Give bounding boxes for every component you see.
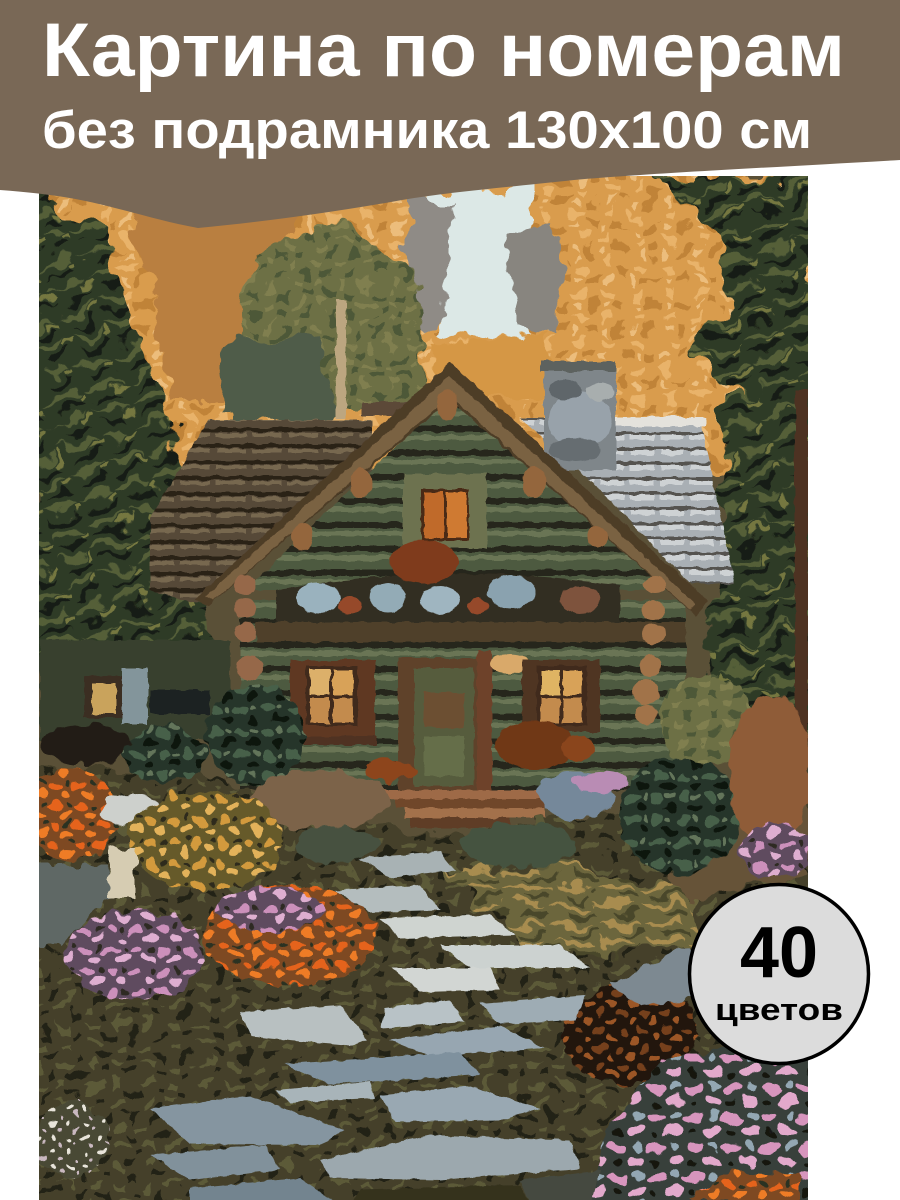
badge number: 40 [740, 913, 818, 993]
right shingled roof [520, 418, 735, 584]
garden foreground [30, 760, 820, 1200]
large rock right [610, 948, 691, 1006]
brown title banner [0, 0, 900, 228]
rust brown bush right [562, 985, 698, 1085]
porch flower pots [495, 721, 575, 769]
white rock left [98, 795, 162, 825]
badge label: цветов [715, 992, 843, 1027]
roof trim [194, 362, 708, 616]
autumn forest background [30, 170, 820, 740]
evergreen shrub by window [205, 685, 305, 785]
stone chimney [540, 361, 616, 470]
flower box on balcony [276, 540, 620, 622]
left window [285, 660, 377, 745]
white flowers bottom left [36, 1102, 108, 1178]
right window [522, 660, 600, 732]
lavender flowers left [65, 911, 205, 999]
left shingled roof [150, 420, 372, 604]
autumn mound near cabin [250, 770, 390, 830]
cabin [150, 361, 735, 828]
dark left undergrowth [40, 725, 130, 765]
left stacked log ends [234, 575, 263, 681]
dark shrub right [620, 755, 740, 875]
stepping stone path [150, 852, 600, 1200]
cabin left annex [40, 640, 230, 740]
orange red shrub left [26, 769, 118, 861]
right stacked log ends [632, 576, 666, 724]
pink flowers bottom right [590, 1040, 815, 1200]
blue rock shrub [540, 771, 616, 819]
title: Картина по номерам [42, 8, 845, 93]
subtitle: без подрамника 130х100 см [42, 101, 812, 160]
gray rocks left [39, 862, 110, 948]
lower log wall [240, 600, 686, 790]
porch door [398, 650, 492, 790]
wooden beam [256, 622, 686, 642]
painting: log cabin in autumn forest [26, 170, 820, 1200]
upper window [403, 474, 487, 548]
color count badge [690, 884, 868, 1064]
yellow flower bush [127, 790, 283, 890]
porch lamp glow [490, 654, 530, 674]
wooden porch steps [385, 790, 555, 828]
log ends along gable [291, 389, 607, 551]
pine trunks [336, 300, 808, 750]
upper gable log wall [245, 395, 670, 590]
pink and orange flower bed [204, 885, 376, 985]
garden bushes and flowers [26, 675, 815, 1200]
